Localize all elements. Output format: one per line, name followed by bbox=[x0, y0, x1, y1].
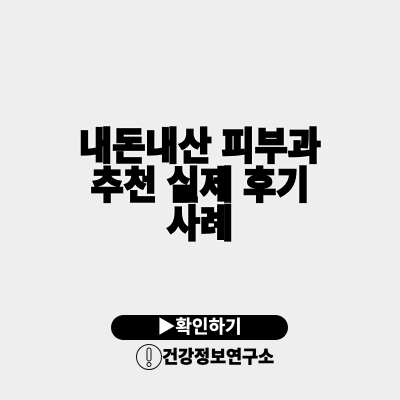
icon: exclamation circle bbox=[136, 344, 162, 370]
title: 사례 bbox=[167, 202, 233, 245]
title: 추천 실제 후기 bbox=[91, 163, 309, 207]
brand name: 건강정보연구소 bbox=[162, 347, 274, 367]
title: 내돈내산 피부과 bbox=[79, 125, 321, 168]
button: confirm: ▶확인하기 bbox=[157, 317, 242, 337]
button: confirm bbox=[111, 315, 288, 340]
title bbox=[79, 125, 321, 245]
source brand bbox=[136, 344, 274, 370]
